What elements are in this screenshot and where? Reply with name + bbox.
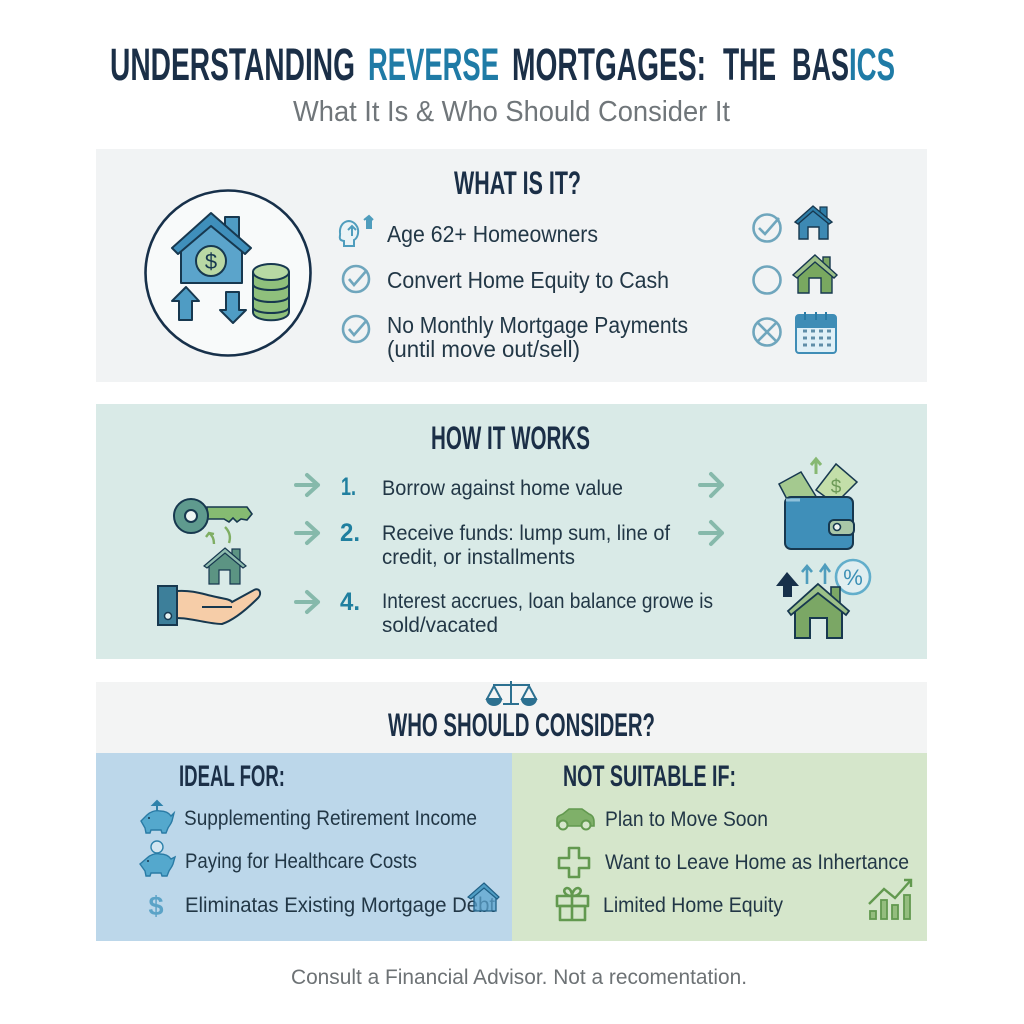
step 2 (340, 519, 670, 569)
icon: wallet with cash: $ (831, 477, 842, 498)
icon: house with money in circle (146, 190, 310, 356)
icon: gift (557, 888, 588, 920)
title: BAS (792, 39, 849, 90)
heading: ideal for: IDEAL FOR: (179, 760, 285, 793)
icon: blue house (795, 206, 832, 239)
heading: how it works: HOW IT WORKS (431, 420, 590, 456)
list text: convert: Convert Home Equity to Cash (387, 267, 669, 293)
arrow (296, 475, 318, 495)
arrow (296, 523, 318, 543)
subtitle: What It Is & Who Should Consider It (293, 96, 730, 128)
list text: age: Age 62+ Homeowners (387, 221, 598, 247)
icon: small house (204, 548, 246, 584)
icon: piggy bank with coin (140, 841, 175, 876)
icon: calendar (796, 312, 836, 353)
icon: key (174, 499, 252, 533)
arrow (700, 474, 722, 496)
step 4: sold/vacated (382, 614, 498, 637)
list text: supplementing: Supplementing Retirement Income (184, 807, 477, 830)
step 4: 4. (340, 588, 360, 616)
icon: plus (559, 848, 589, 877)
list text: no monthly payments: No Monthly Mortgage Payments (387, 312, 688, 338)
heading: who should consider: WHO SHOULD CONSIDER? (388, 707, 655, 743)
list text: eliminatas: Eliminatas Existing Mortgage Debt (185, 894, 495, 917)
title: MORTGAGES: (512, 39, 706, 90)
step 1: 1. (341, 473, 356, 501)
icon: green house (793, 255, 837, 293)
step 1: Borrow against home value (382, 477, 623, 500)
panel: what is it (96, 149, 927, 382)
step 1 (341, 473, 623, 501)
step 2: credit, or installments (382, 546, 575, 569)
panel: how it works (96, 404, 927, 659)
icon: piggy bank with arrow (141, 801, 174, 833)
step 2: 2. (340, 519, 360, 547)
panel: not suitable if (512, 753, 927, 941)
heading: not suitable if: NOT SUITABLE IF: (563, 760, 736, 793)
icon: small blue house (468, 883, 499, 911)
list text: plan to move: Plan to Move Soon (605, 808, 768, 831)
icon: house with rising rate: % (843, 565, 863, 590)
title: REVERSE (368, 39, 499, 90)
list text: paying: Paying for Healthcare Costs (185, 850, 417, 873)
arrow (700, 522, 722, 544)
step 4: Interest accrues, loan balance growe is (382, 590, 713, 613)
list icon: check (343, 316, 369, 342)
list text: no monthly payments (387, 312, 688, 362)
step 4 (340, 588, 713, 637)
icon: small curved arrows (206, 527, 230, 544)
icon: empty circle (754, 266, 780, 294)
list text: no monthly payments: (until move out/sell) (387, 336, 580, 362)
footer disclaimer: Consult a Financial Advisor. Not a recomentation. (291, 966, 747, 989)
panel: who should consider (96, 681, 927, 941)
icon: check circle (754, 214, 780, 242)
list icon: head with arrow (340, 216, 373, 246)
list text: limited equity: Limited Home Equity (603, 894, 783, 917)
list text: want to leave: Want to Leave Home as Inhertance (605, 851, 909, 874)
title: THE (723, 39, 776, 90)
icon: dollar sign: $ (148, 891, 164, 921)
icon: wallet with cash (779, 459, 857, 549)
icon: growth chart (869, 880, 911, 919)
panel: ideal for (96, 753, 512, 941)
icon: balance scale (487, 681, 536, 705)
step 2: Receive funds: lump sum, line of (382, 522, 670, 545)
icon: x circle (754, 318, 780, 346)
title (110, 39, 895, 90)
heading: what is it: WHAT IS IT? (454, 165, 581, 201)
icon: house with money in circle: $ (205, 249, 217, 274)
icon: house with rising rate (776, 560, 870, 638)
arrow (296, 592, 318, 612)
title: UNDERSTANDING (110, 39, 355, 90)
icon: car (557, 809, 594, 830)
list icon: check (343, 266, 369, 292)
title: ICS (849, 39, 895, 90)
icon: open hand (158, 586, 260, 625)
